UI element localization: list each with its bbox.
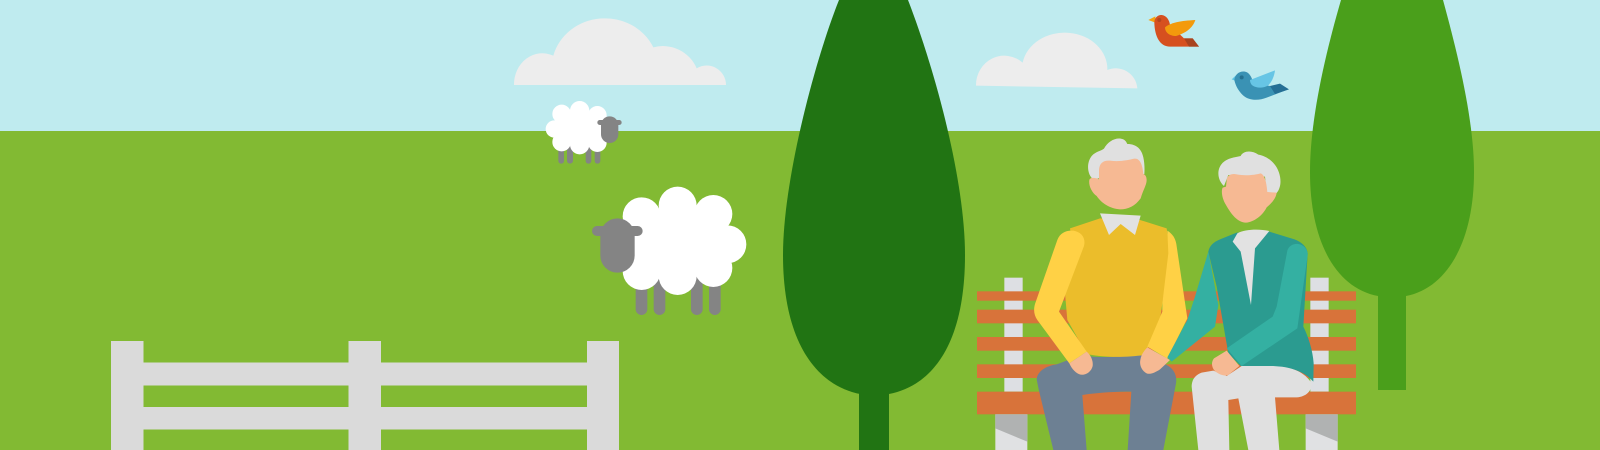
tree: dark green [783, 0, 965, 450]
bench [977, 278, 1356, 450]
woman trousers [1192, 366, 1312, 450]
woman shirt [1233, 230, 1269, 305]
man face [1089, 159, 1147, 209]
cloud: right [976, 33, 1137, 88]
cloud: left [514, 18, 726, 85]
man right hand [1140, 347, 1170, 374]
man left arm [1034, 231, 1087, 363]
tree: light green [1310, 0, 1474, 390]
man right arm [1147, 231, 1187, 359]
woman hair [1218, 152, 1280, 193]
woman [1167, 152, 1314, 450]
woman left arm [1167, 252, 1218, 362]
woman jacket [1208, 232, 1314, 382]
bird: orange [1148, 15, 1199, 47]
man [1034, 139, 1187, 450]
woman right arm [1227, 244, 1308, 366]
man hair [1088, 139, 1145, 179]
woman hand [1212, 351, 1239, 375]
man vest [1065, 218, 1170, 357]
sky [0, 0, 1600, 131]
small sheep [546, 101, 622, 164]
man collar [1100, 213, 1141, 235]
woman face [1222, 173, 1277, 223]
fence [111, 341, 619, 450]
large sheep [592, 187, 746, 315]
bench and couple [977, 139, 1356, 450]
man left hand [1069, 352, 1093, 375]
bird: blue [1232, 70, 1289, 100]
man trousers [1037, 354, 1176, 450]
grass [0, 131, 1600, 450]
